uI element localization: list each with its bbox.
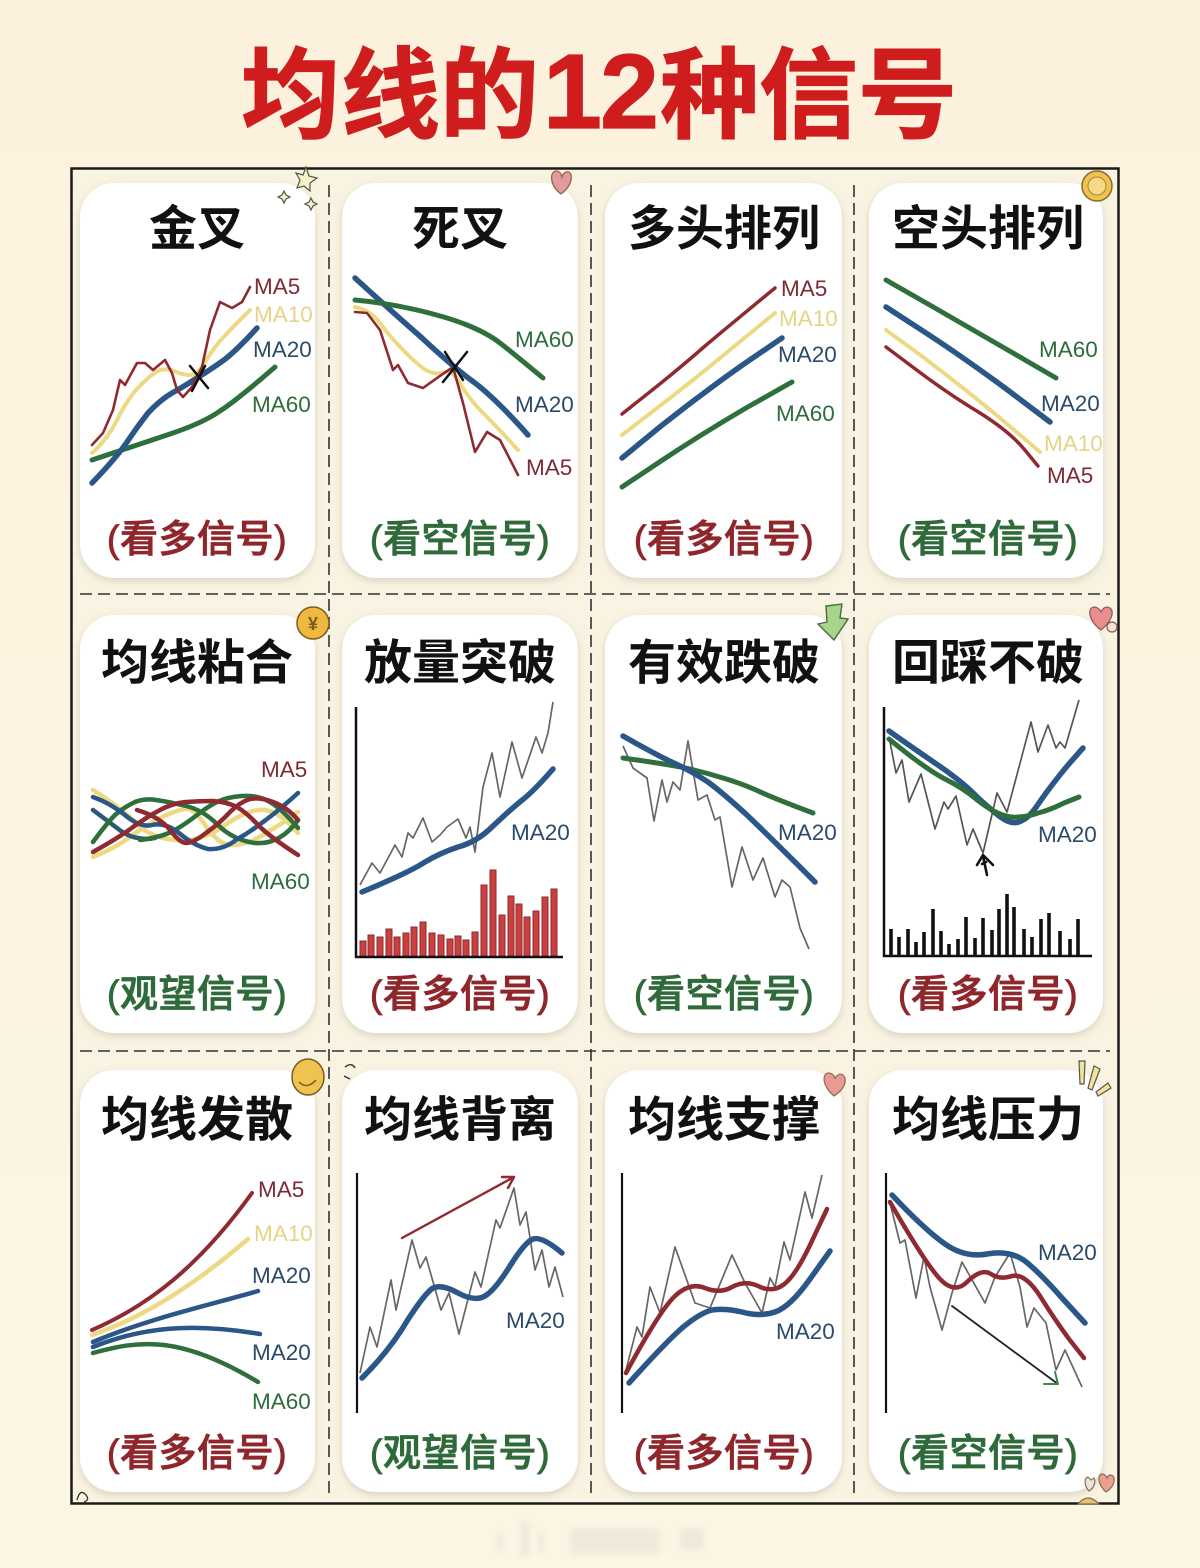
- chart: diverging moving averages: [92, 1177, 313, 1414]
- chart: death cross: MA20: [515, 392, 574, 417]
- chart: diverging moving averages: MA20: [252, 1263, 311, 1288]
- chart: death cross: MA5: [526, 455, 572, 480]
- panel: 死叉: [342, 183, 578, 578]
- icon: smiling coin: [292, 1059, 324, 1095]
- title: 2: [600, 33, 659, 151]
- arrow: falling trend: [952, 1306, 1058, 1384]
- chart: bearish alignment: MA5: [1047, 463, 1093, 488]
- icon: coin: [1082, 171, 1112, 201]
- chart: moving average resistance: [886, 1173, 1097, 1413]
- chart: bearish alignment: [886, 280, 1103, 488]
- signal label: 看多信号: (看多信号): [898, 974, 1078, 1016]
- chart: divergence: [357, 1173, 565, 1413]
- title: 种: [660, 40, 759, 151]
- heading: 回踩不破: 回踩不破: [892, 637, 1084, 690]
- chart: bullish alignment: MA5: [781, 276, 827, 301]
- chart: converging moving averages: MA60: [251, 869, 310, 894]
- heading: 均线背离: 均线背离: [364, 1094, 556, 1147]
- title: 线: [341, 40, 440, 151]
- icon: pink heart: [824, 1073, 845, 1096]
- chart: bearish alignment: MA20: [1041, 391, 1100, 416]
- icon: hearts: [1090, 607, 1117, 632]
- dashed grid dividers: [80, 185, 1110, 1495]
- signal label: 看多信号: (看多信号): [107, 519, 287, 561]
- heading: 死叉: 死叉: [412, 203, 508, 256]
- icon: corner doodle: [77, 1492, 88, 1502]
- panel: 有效跌破: [605, 615, 842, 1033]
- volume bars: [891, 894, 1078, 957]
- icon: yuan coin: ¥: [308, 614, 318, 634]
- panel: 放量突破: [342, 615, 578, 1033]
- icon: yuan coin: [297, 607, 329, 639]
- chart: divergence: MA20: [506, 1308, 565, 1333]
- heading: 均线粘合: 均线粘合: [101, 637, 293, 690]
- chart: death cross: MA60: [515, 327, 574, 352]
- title: 的: [440, 40, 539, 151]
- icon: green down arrow: [818, 604, 848, 640]
- heading: 均线支撑: 均线支撑: [628, 1094, 820, 1147]
- icon: heart: [552, 171, 571, 194]
- title: 均: [241, 40, 340, 151]
- panel: 多头排列: [605, 183, 842, 578]
- chart: pullback holds: [884, 700, 1097, 957]
- chart: converging moving averages: [93, 757, 310, 894]
- chart: golden cross: [92, 274, 313, 483]
- arrow: bounce point: [977, 855, 993, 875]
- panel: 空头排列: [869, 183, 1103, 578]
- chart: golden cross: MA20: [253, 337, 312, 362]
- signal label: 看空信号: (看空信号): [634, 974, 814, 1016]
- title: 信: [759, 40, 858, 151]
- chart: bearish alignment: MA60: [1039, 337, 1098, 362]
- heading: 有效跌破: 有效跌破: [628, 637, 820, 690]
- heading: 空头排列: 空头排列: [892, 203, 1084, 256]
- heading: 多头排列: 多头排列: [628, 203, 820, 256]
- chart: diverging moving averages: MA20: [252, 1340, 311, 1365]
- heading: 金叉: 金叉: [149, 203, 245, 256]
- panel: 均线支撑: [605, 1070, 842, 1492]
- panel: 回踩不破: [869, 615, 1103, 1033]
- arrow: rising highs: [402, 1177, 514, 1238]
- chart: moving average resistance: MA20: [1038, 1240, 1097, 1265]
- watermark: [497, 1522, 704, 1556]
- signal label: 观望信号: (观望信号): [107, 974, 287, 1016]
- chart: bullish alignment: MA20: [778, 342, 837, 367]
- chart: valid breakdown: [623, 736, 837, 949]
- chart: bearish alignment: MA10: [1044, 431, 1103, 456]
- icon: corner hearts: [1078, 1474, 1114, 1504]
- title: 号: [858, 40, 957, 151]
- heading: 放量突破: 放量突破: [364, 637, 556, 690]
- signal label: 看多信号: (看多信号): [370, 974, 550, 1016]
- chart: volume breakout: MA20: [511, 820, 570, 845]
- signal label: 看空信号: (看空信号): [898, 519, 1078, 561]
- panel: 均线发散: [80, 1070, 315, 1492]
- panel: 均线背离: [342, 1070, 578, 1492]
- panel: 金叉: [80, 183, 315, 578]
- chart: converging moving averages: MA5: [261, 757, 307, 782]
- signal label: 观望信号: (观望信号): [370, 1433, 550, 1475]
- chart: pullback holds: MA20: [1038, 822, 1097, 847]
- chart: bullish alignment: MA60: [776, 401, 835, 426]
- chart: valid breakdown: MA20: [778, 820, 837, 845]
- chart: golden cross: MA5: [254, 274, 300, 299]
- heading: 均线发散: 均线发散: [101, 1094, 293, 1147]
- chart: golden cross: MA10: [254, 302, 313, 327]
- icon: sparkle: [344, 1065, 355, 1079]
- icon: stars: [278, 167, 317, 210]
- signal label: 看多信号: (看多信号): [634, 519, 814, 561]
- frame: [72, 168, 1118, 1504]
- chart: moving average support: MA20: [776, 1319, 835, 1344]
- chart: volume breakout: [356, 702, 570, 957]
- chart: diverging moving averages: MA60: [252, 1389, 311, 1414]
- signal label: 看空信号: (看空信号): [898, 1433, 1078, 1475]
- panel: 均线压力: [869, 1070, 1103, 1492]
- icon: yellow rays: [1079, 1061, 1111, 1096]
- chart: golden cross: MA60: [252, 392, 311, 417]
- chart: moving average support: [622, 1173, 835, 1413]
- chart: bullish alignment: [622, 276, 838, 487]
- signal label: 看多信号: (看多信号): [634, 1433, 814, 1475]
- signal label: 看多信号: (看多信号): [107, 1433, 287, 1475]
- chart: diverging moving averages: MA10: [254, 1221, 313, 1246]
- chart: bullish alignment: MA10: [779, 306, 838, 331]
- volume bars: [360, 870, 557, 956]
- signal label: 看空信号: (看空信号): [370, 519, 550, 561]
- panel: 均线粘合: [80, 615, 315, 1033]
- title: 1: [543, 33, 602, 151]
- chart: diverging moving averages: MA5: [258, 1177, 304, 1202]
- chart: death cross: [355, 278, 574, 480]
- heading: 均线压力: 均线压力: [892, 1094, 1084, 1147]
